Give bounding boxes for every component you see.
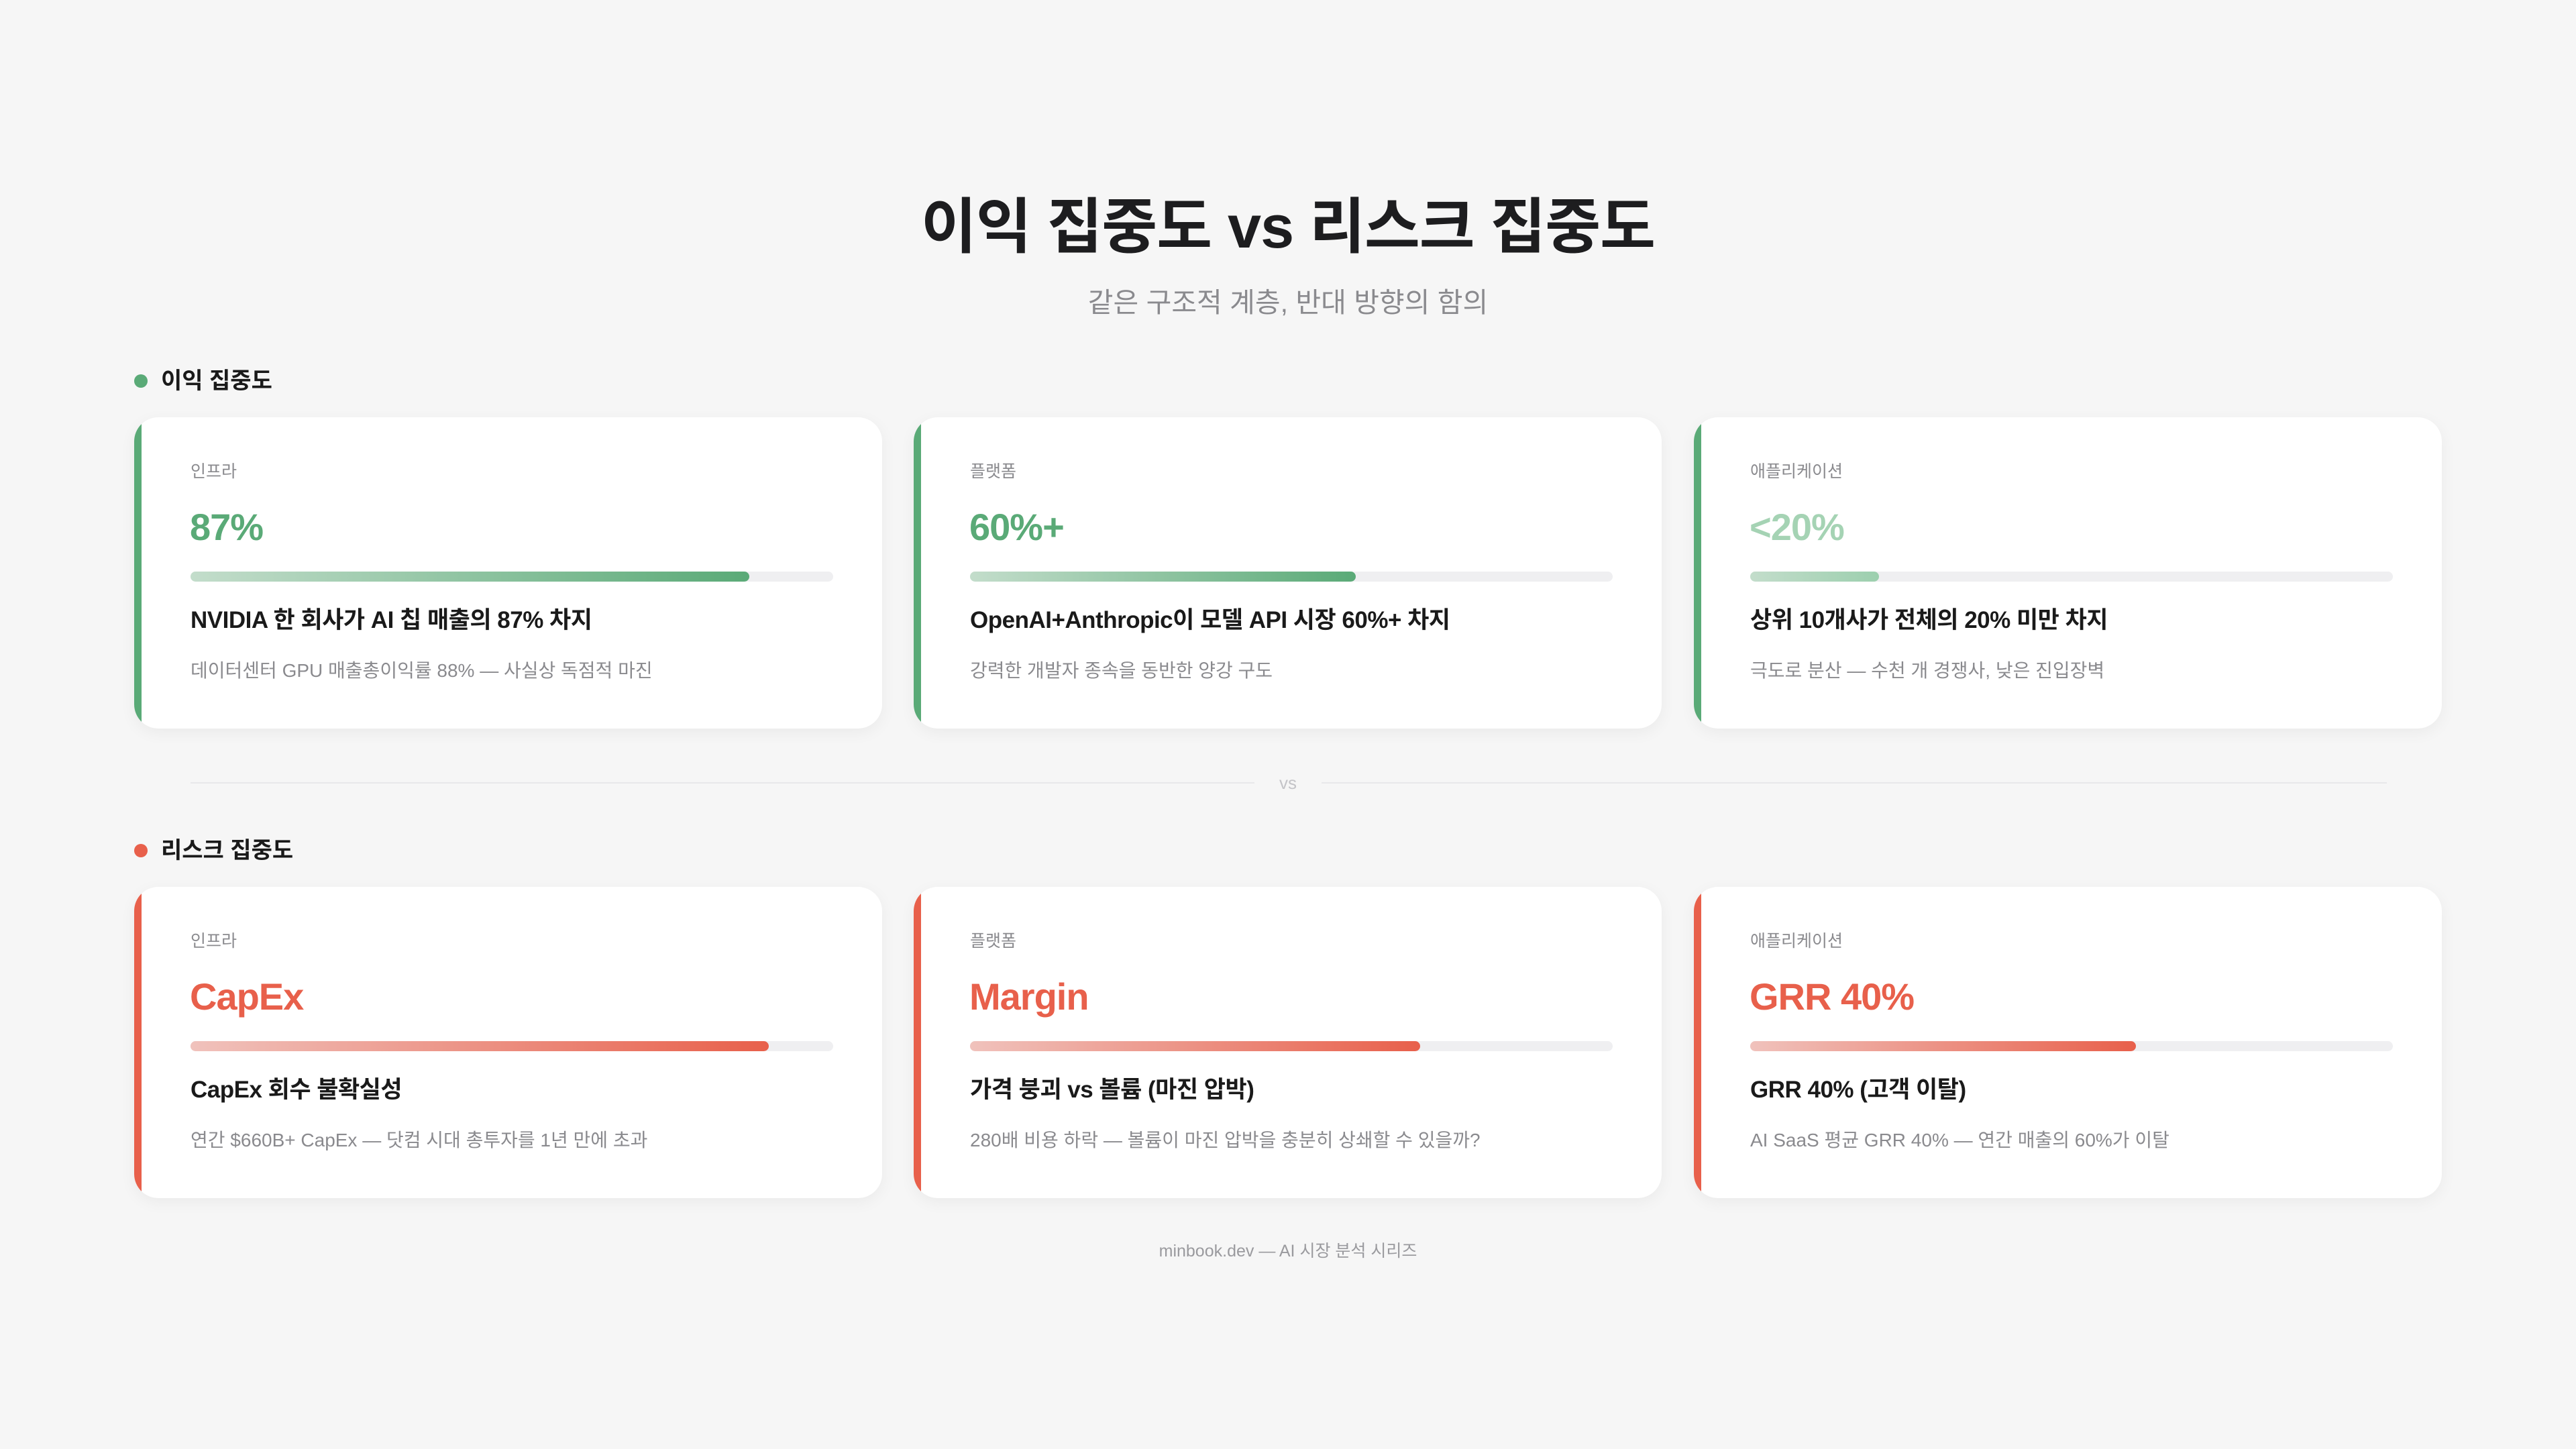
footer: minbook.dev — AI 시장 분석 시리즈 (1159, 1242, 1417, 1260)
card: risk platform: 가격 붕괴 vs 볼륨 (마진 압박) (970, 1077, 1254, 1103)
title: 이익 집중도 vs 리스크 집중도 (921, 194, 1655, 261)
card: profit infra: NVIDIA 한 회사가 AI 칩 매출의 87% 차지 (191, 607, 592, 633)
bar: 20% (1750, 572, 2393, 582)
card: risk infra: CapEx 회수 불확실성 (191, 1077, 402, 1103)
card: risk application: GRR 40% (고객 이탈) (1750, 1077, 1966, 1103)
card: risk infra: CapEx (190, 975, 303, 1018)
card: risk platform: Margin (969, 975, 1089, 1018)
card: risk application: AI SaaS 평균 GRR 40% — 연간 매출의 60%가 이탈 (1750, 1130, 2169, 1150)
section heading: risk concentration: 리스크 집중도 (161, 838, 293, 863)
card: profit infra: 데이터센터 GPU 매출총이익률 88% — 사실상 독점적 마진 (191, 660, 653, 681)
bar: 87% (191, 572, 833, 582)
card: profit platform: OpenAI+Anthropic이 모델 API 시장 60%+ 차지 (970, 607, 1450, 633)
card: profit infra (134, 417, 882, 729)
card: profit application: <20% (1750, 506, 1844, 548)
card: profit platform: 강력한 개발자 종속을 동반한 양강 구도 (970, 660, 1273, 681)
card: risk application (1694, 887, 2442, 1198)
card: risk application: GRR 40% (1750, 975, 1914, 1018)
card: risk application: 애플리케이션 (1750, 932, 1843, 951)
card: profit platform: 60%+ (969, 506, 1064, 548)
bar: 70% (970, 1041, 1613, 1051)
card: profit application (1694, 417, 2442, 729)
card: profit application: 상위 10개사가 전체의 20% 미만 차지 (1750, 607, 2108, 633)
card: profit application: 극도로 분산 — 수천 개 경쟁사, 낮은 진입장벽 (1750, 660, 2104, 681)
card: profit platform: 플랫폼 (970, 462, 1016, 481)
bar: 60% (1750, 1041, 2393, 1051)
card: risk platform (914, 887, 1662, 1198)
vs divider: vs (1279, 773, 1297, 793)
card: risk platform: 280배 비용 하락 — 볼륨이 마진 압박을 충분히 상쇄할 수 있을까? (970, 1130, 1481, 1150)
card: profit infra: 인프라 (191, 462, 237, 481)
card: profit application: 애플리케이션 (1750, 462, 1843, 481)
section heading: profit concentration: 이익 집중도 (161, 368, 272, 394)
card: risk infra (134, 887, 882, 1198)
card: profit platform (914, 417, 1662, 729)
bar: 60% (970, 572, 1613, 582)
card: risk platform: 플랫폼 (970, 932, 1016, 951)
card: risk infra: 인프라 (191, 932, 237, 951)
card: risk infra: 연간 $660B+ CapEx — 닷컴 시대 총투자를 1년 만에 초과 (191, 1130, 647, 1150)
subtitle: 같은 구조적 계층, 반대 방향의 함의 (1088, 287, 1488, 318)
card: profit infra: 87% (190, 506, 263, 548)
bar: 90% (191, 1041, 833, 1051)
